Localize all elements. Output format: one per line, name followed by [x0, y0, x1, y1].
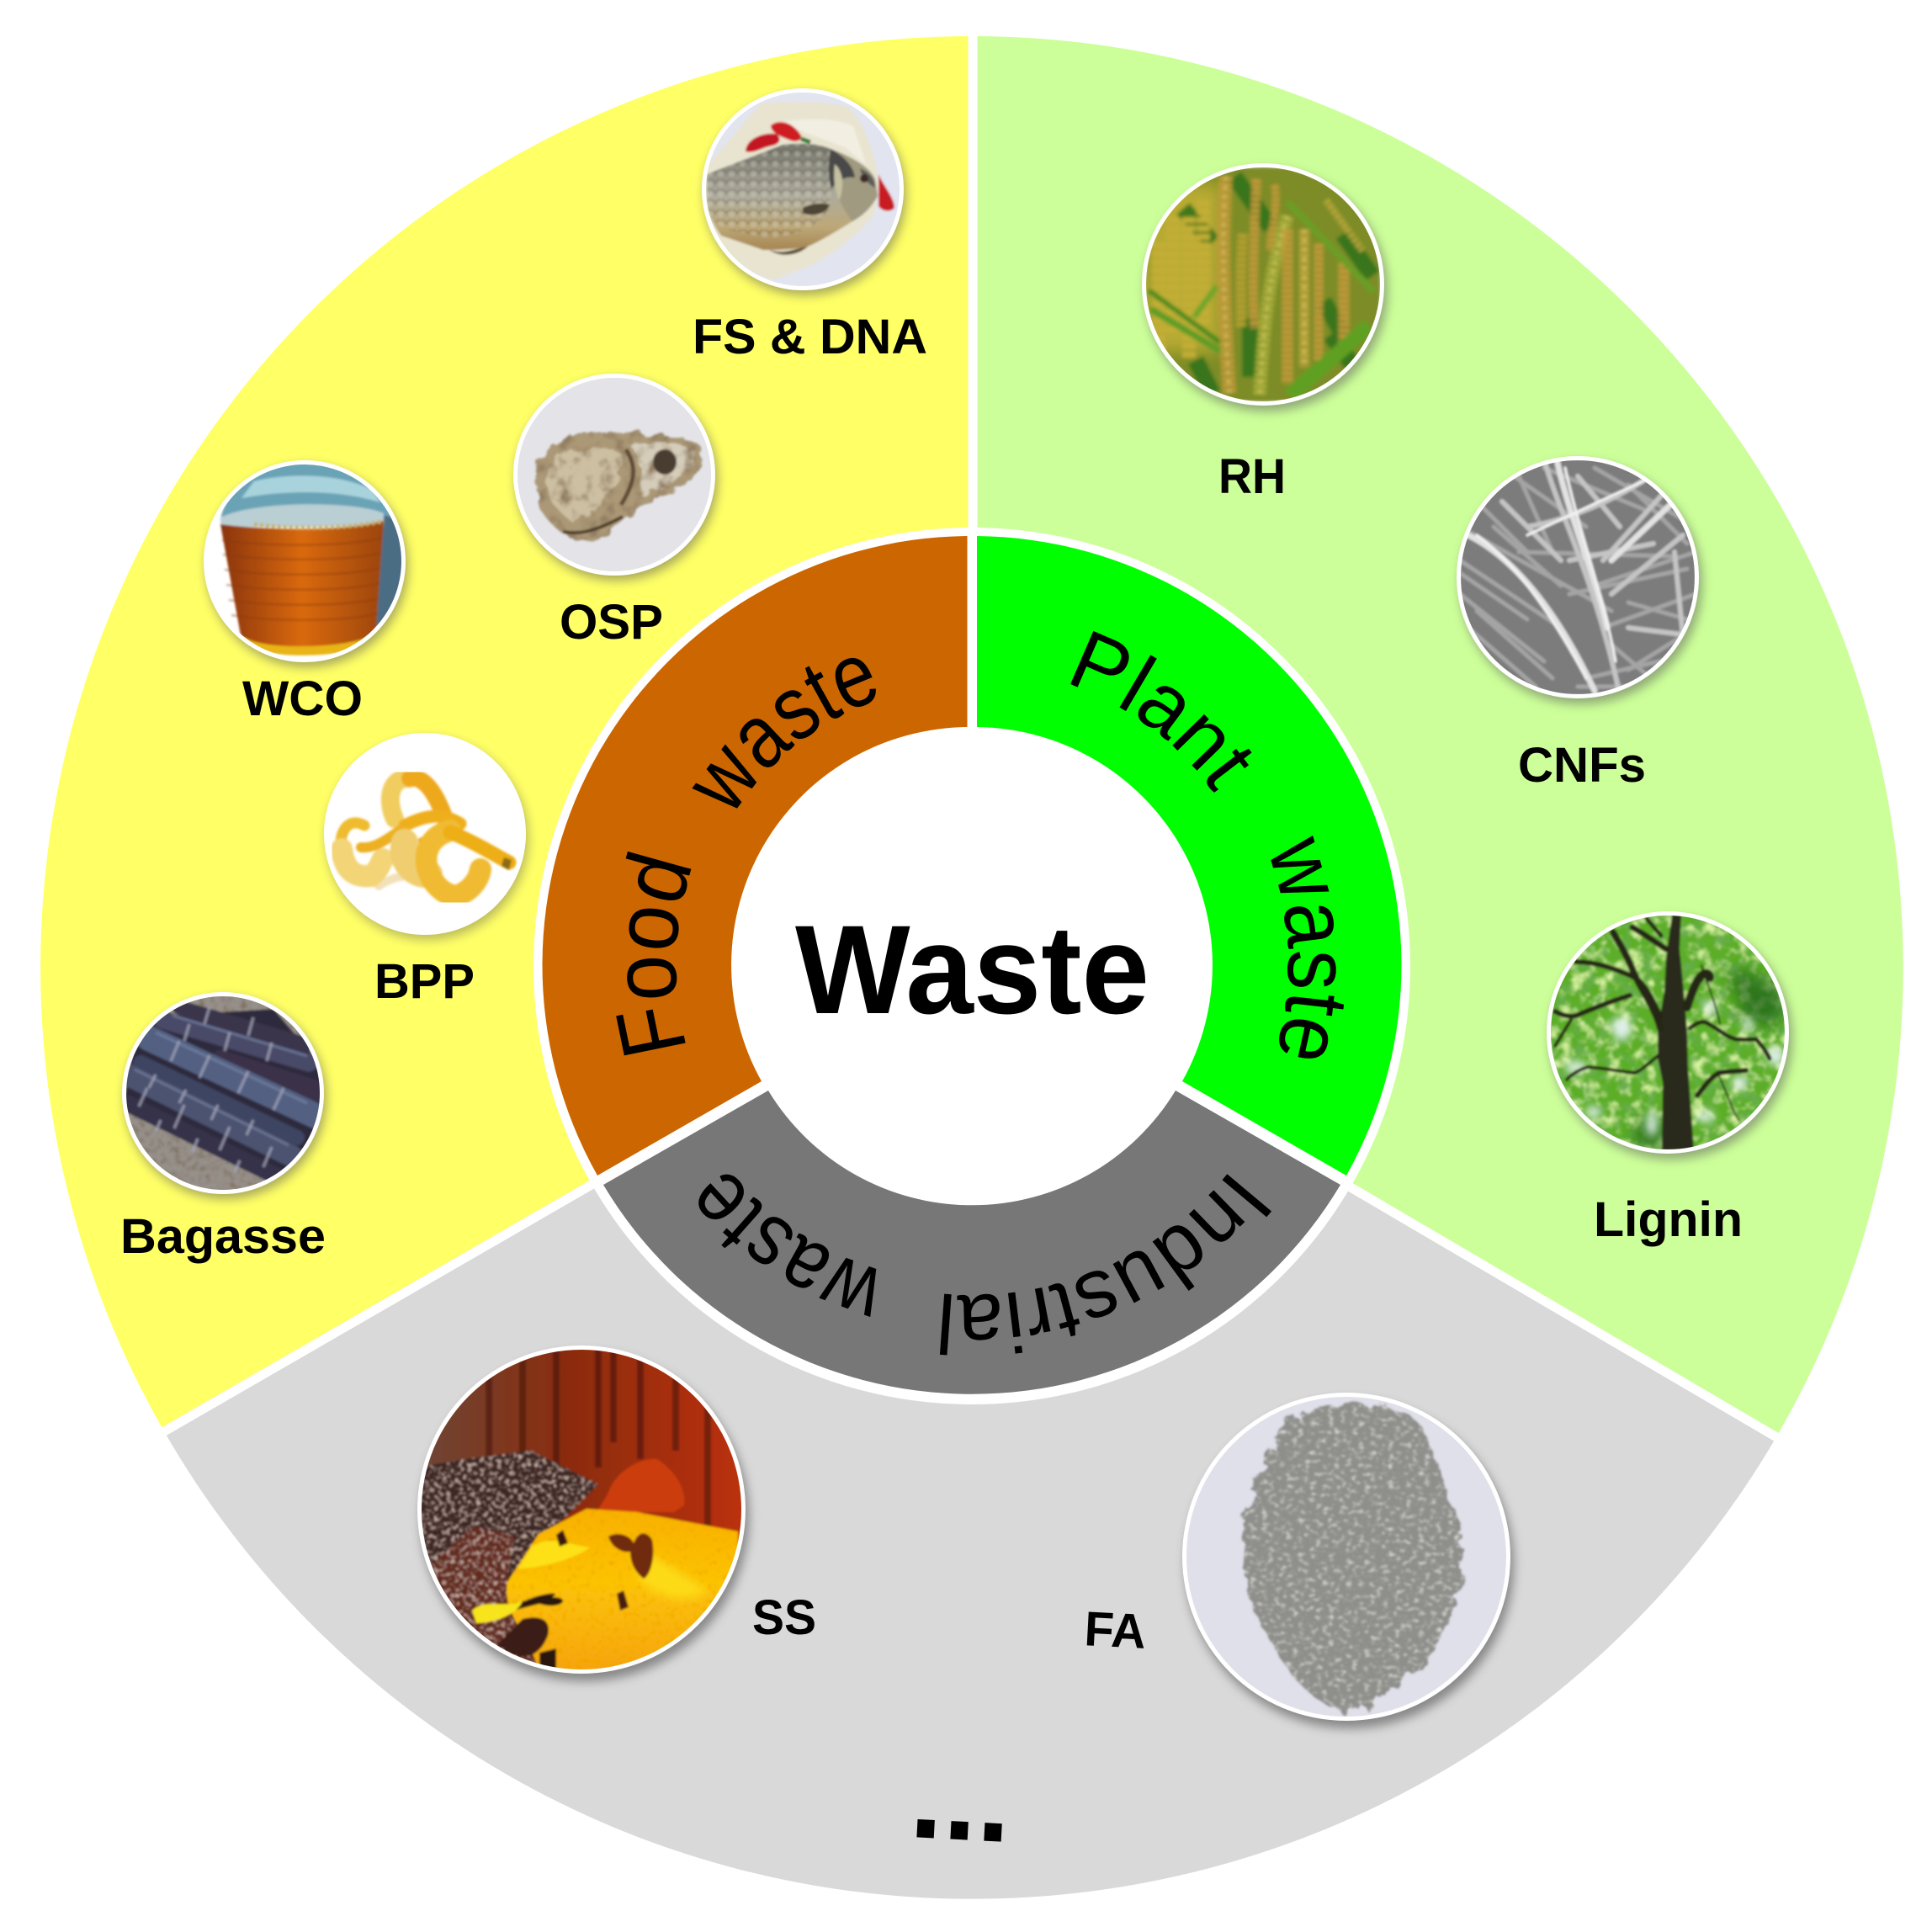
photo: banana peel: [324, 733, 528, 940]
panel: plant waste ring segment: [977, 536, 1401, 1176]
label: Bagasse: Bagasse: [120, 1209, 326, 1264]
label: BPP: BPP: [374, 954, 475, 1009]
heading: waste (plant): waste: [1271, 835, 1345, 1059]
label: RH: RH: [1218, 449, 1286, 504]
label: OSP: OSP: [560, 595, 663, 650]
heading: Industrial: Industrial: [939, 1174, 1271, 1355]
heading: waste (industrial): waste: [698, 1175, 877, 1318]
panel: plant waste outer sector: [972, 36, 1903, 1436]
photo: cellulose nanofibers micrograph: [1457, 456, 1702, 704]
photo: waste cooking oil jar: [204, 460, 408, 667]
label: FA: FA: [1083, 1601, 1148, 1659]
label: Lignin: Lignin: [1594, 1192, 1743, 1247]
photo: rice plants: [1142, 163, 1388, 411]
panel: food waste ring segment: [543, 536, 968, 1176]
photo: fly ash powder: [1182, 1393, 1514, 1728]
photo: tree lignin source: [1547, 911, 1792, 1160]
photo: sugarcane bagasse: [122, 992, 326, 1199]
heading: Food: Food: [616, 852, 692, 1055]
title: Waste: Waste: [795, 899, 1149, 1040]
label: SS: SS: [752, 1590, 816, 1645]
panel: food waste outer sector: [40, 36, 972, 1431]
ellipsis: more waste types: ...: [907, 1728, 1015, 1868]
photo: steel slag: [417, 1346, 749, 1681]
centre circle: [734, 727, 1210, 1203]
label: FS & DNA: FS & DNA: [693, 310, 927, 364]
panel: industrial waste outer sector: [164, 965, 1777, 1899]
panel: industrial waste ring segment: [603, 1091, 1340, 1394]
photo: oyster shell: [513, 374, 718, 581]
heading: Plant: Plant: [1070, 631, 1252, 793]
label: WCO: WCO: [242, 671, 363, 726]
heading: waste (food): waste: [692, 658, 876, 809]
label: CNFs: CNFs: [1518, 738, 1646, 793]
photo: fish on plate: [702, 88, 906, 295]
